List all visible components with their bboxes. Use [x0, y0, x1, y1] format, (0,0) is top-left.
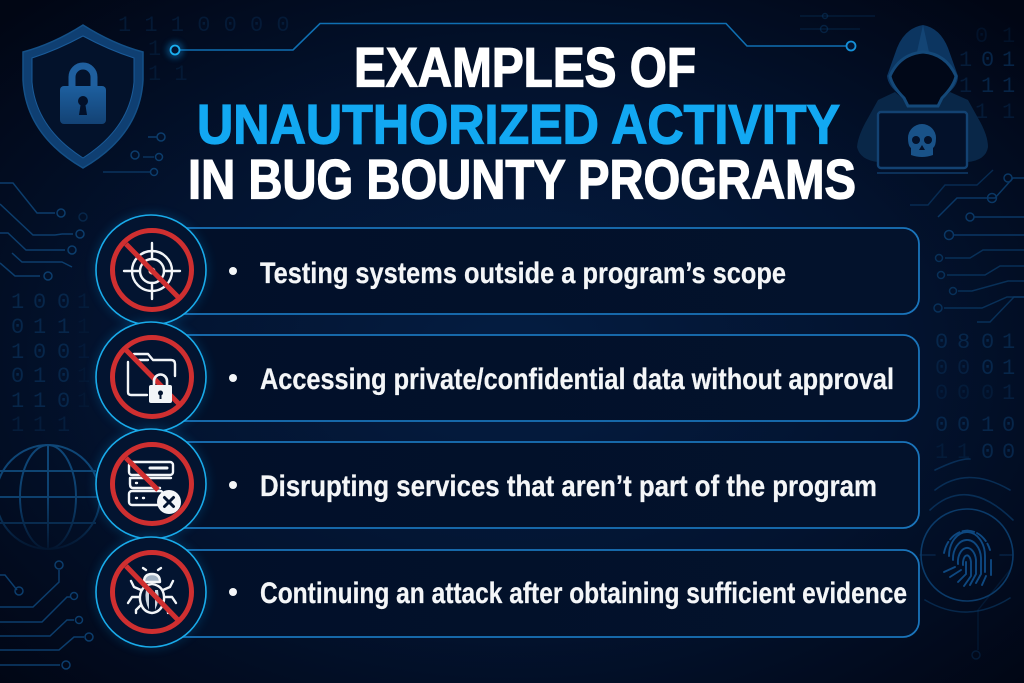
icon: fingerprint	[920, 459, 1013, 612]
title: IN BUG BOUNTY PROGRAMS	[188, 148, 856, 210]
binary digits: background pattern: 0	[935, 356, 948, 381]
binary digits: background pattern: 0	[57, 340, 70, 365]
binary digits: background pattern: 1	[957, 440, 970, 465]
icon: server error badge	[157, 490, 181, 514]
binary digits: background pattern: 1	[981, 74, 994, 99]
binary digits: background pattern: 0	[33, 340, 46, 365]
binary digits: background pattern: 1	[981, 413, 994, 438]
binary digits: background pattern: 1	[57, 315, 70, 340]
icon: shield with padlock	[23, 25, 143, 168]
binary digits: background pattern: 0	[11, 364, 24, 389]
icon: padlock on folder	[149, 374, 172, 403]
binary digits: background pattern: 1	[975, 100, 988, 125]
binary digits: background pattern: 0	[981, 48, 994, 73]
binary digits: background pattern	[11, 13, 1015, 465]
icon: hooded hacker with laptop	[857, 25, 988, 173]
binary digits: background pattern: 0	[57, 290, 70, 315]
panel: item 3 disrupting services	[94, 427, 919, 541]
binary digits: background pattern: 0	[1002, 440, 1015, 465]
icon: globe	[0, 445, 100, 549]
binary digits: background pattern: 1	[77, 389, 90, 414]
binary digits: background pattern: 0	[57, 389, 70, 414]
binary digits: background pattern: 1	[959, 48, 972, 73]
binary digits: background pattern: 1	[11, 389, 24, 414]
binary digits: background pattern: 1	[77, 315, 90, 340]
title: EXAMPLES OF	[354, 36, 696, 98]
binary digits: background pattern: 1	[1002, 74, 1015, 99]
binary digits: background pattern: 0	[981, 440, 994, 465]
binary digits: background pattern: 0	[975, 24, 988, 49]
binary digits: background pattern: 0	[957, 413, 970, 438]
binary digits: background pattern: 0	[11, 315, 24, 340]
panel: item 2 private data	[94, 320, 919, 434]
binary digits: background pattern: 1	[33, 315, 46, 340]
binary digits: background pattern: 1	[1002, 381, 1015, 406]
circuit traces: left side	[0, 133, 165, 669]
binary digits: background pattern: 1 1 1 0 0 0 0	[118, 13, 290, 38]
binary digits: background pattern: 1	[11, 290, 24, 315]
binary digits: background pattern: 1	[935, 440, 948, 465]
binary digits: background pattern: 0	[935, 330, 948, 355]
circuit traces: right side	[800, 14, 1024, 659]
binary digits: background pattern: 1	[959, 74, 972, 99]
binary digits: background pattern: 0	[957, 356, 970, 381]
binary digits: background pattern: 1	[33, 413, 46, 438]
binary digits: background pattern: 0	[33, 290, 46, 315]
binary digits: background pattern: 0	[935, 413, 948, 438]
binary digits: background pattern: 0	[957, 381, 970, 406]
panel: item 1 out of scope	[94, 213, 919, 327]
binary digits: background pattern: 1	[11, 340, 24, 365]
binary digits: background pattern: 1	[1002, 24, 1015, 49]
panel: item 4 continuing attack	[94, 535, 919, 649]
panel: item 3 disrupting services: Disrupting services that aren’t part of the program	[260, 470, 877, 503]
binary digits: background pattern: 0	[981, 356, 994, 381]
binary digits: background pattern: 0	[981, 330, 994, 355]
binary digits: background pattern: 1	[77, 364, 90, 389]
binary digits: background pattern: 1	[1002, 48, 1015, 73]
binary digits: background pattern: 1	[33, 364, 46, 389]
binary digits: background pattern: 1	[11, 413, 24, 438]
binary digits: background pattern: 1	[33, 389, 46, 414]
binary digits: background pattern: 8	[957, 330, 970, 355]
title: UNAUTHORIZED ACTIVITY	[197, 92, 840, 156]
panel: item 2 private data: Accessing private/confidential data without approval	[260, 363, 894, 396]
binary digits: background pattern: 1	[77, 290, 90, 315]
panel: item 1 out of scope: Testing systems outside a program’s scope	[260, 257, 786, 290]
title	[188, 36, 856, 210]
circuit accent line: top of title	[166, 24, 856, 59]
binary digits: background pattern: 1	[1002, 356, 1015, 381]
binary digits: background pattern: 1	[1002, 100, 1015, 125]
binary digits: background pattern: 1	[57, 413, 70, 438]
binary digits: background pattern: 0	[1002, 413, 1015, 438]
binary digits: background pattern: 0	[57, 364, 70, 389]
binary digits: background pattern: 0	[981, 381, 994, 406]
binary digits: background pattern: 1	[77, 340, 90, 365]
binary digits: background pattern: 1	[1002, 330, 1015, 355]
binary digits: background pattern: 0	[935, 381, 948, 406]
binary digits: background pattern: 1 1	[148, 62, 188, 87]
binary digits: background pattern: 1	[148, 37, 161, 62]
